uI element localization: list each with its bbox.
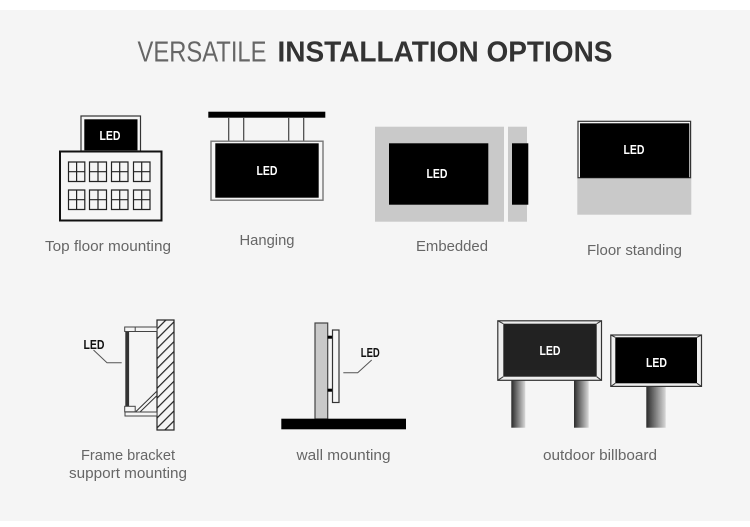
label: hanging: Hanging <box>240 232 294 249</box>
icon: wall mounting <box>281 323 406 429</box>
icon: outdoor billboard: LED <box>646 356 667 370</box>
icon: frame bracket support <box>84 320 174 430</box>
title: VERSATILE <box>138 36 266 68</box>
label: frame bracket support mounting <box>69 447 187 482</box>
icon: floor standing: LED <box>624 143 644 157</box>
icon: hanging <box>208 112 325 200</box>
icon: top floor mounting: LED <box>100 129 120 143</box>
icon: outdoor billboard <box>498 321 702 428</box>
icon: frame bracket support: LED <box>84 338 104 352</box>
label: wall mounting: wall mounting <box>295 447 390 464</box>
icon: hanging: LED <box>256 164 278 178</box>
icon: floor standing <box>577 121 691 215</box>
title: INSTALLATION OPTIONS <box>278 36 612 68</box>
icon: wall mounting: LED <box>361 346 380 360</box>
icon: top floor mounting <box>60 116 162 220</box>
label: frame bracket support mounting: support mounting <box>69 465 187 482</box>
label: frame bracket support mounting: Frame bracket <box>81 447 176 464</box>
title <box>138 36 612 68</box>
icon: embedded <box>375 127 528 222</box>
label: outdoor billboard: outdoor billboard <box>543 447 657 464</box>
icon: embedded: LED <box>426 167 448 181</box>
label: embedded: Embedded <box>416 238 488 255</box>
label: floor standing: Floor standing <box>587 242 682 259</box>
icon: outdoor billboard: LED <box>540 344 560 358</box>
label: top floor mounting: Top floor mounting <box>45 238 171 255</box>
